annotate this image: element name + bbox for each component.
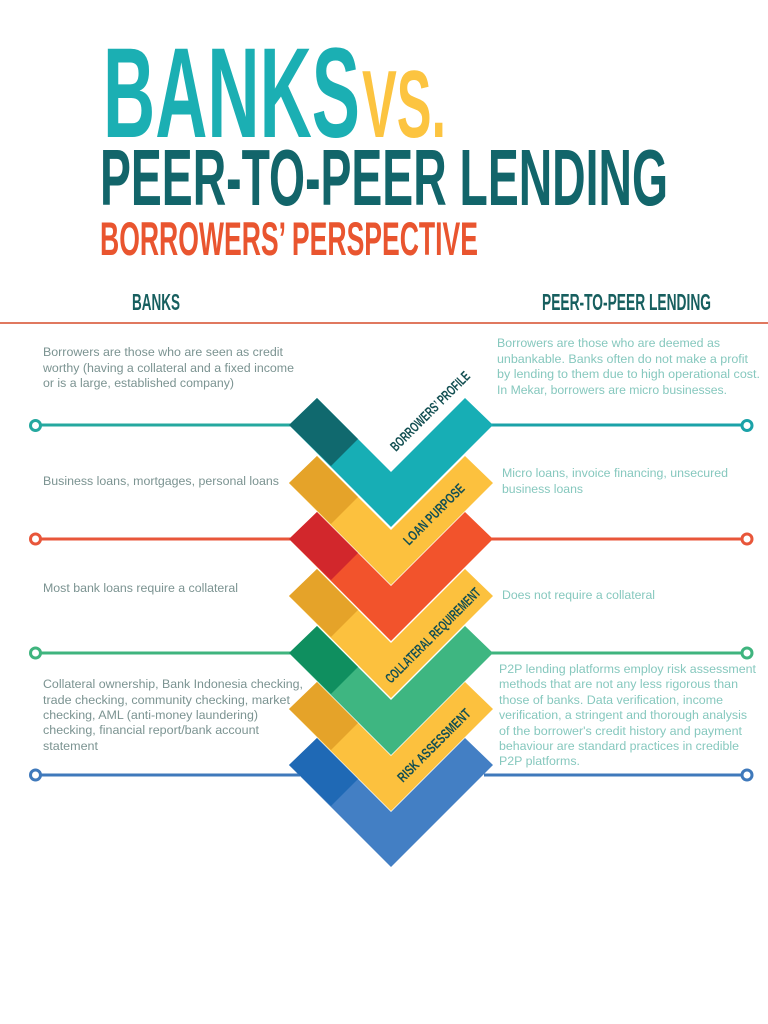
connector line: row 1	[30, 420, 752, 430]
text: banks loan purpose: Business loans, mortgages, personal loans	[43, 474, 279, 488]
text: P2P risk assessment: of the borrower's credit history and payment	[499, 724, 743, 738]
connector line: row 2	[30, 534, 752, 544]
text: banks collateral requirement: Most bank loans require a collateral	[43, 581, 238, 595]
text: P2P borrowers' profile: In Mekar, borrowers are micro businesses.	[497, 383, 727, 397]
column heading: Banks: BANKS	[132, 289, 180, 315]
chevron: yellow, risk assessment	[289, 682, 493, 811]
text: P2P loan purpose: Micro loans, invoice financing, unsecured	[502, 466, 728, 480]
connector line: row 4	[30, 770, 752, 780]
text: P2P loan purpose: business loans	[502, 482, 583, 496]
text: P2P borrowers' profile: Borrowers are those who are deemed as	[497, 336, 720, 350]
label: collateral requirement: COLLATERAL REQUIREMENT	[382, 584, 484, 686]
chevron: yellow, collateral requirement	[289, 569, 493, 698]
title: Banks vs.: BANKS	[103, 22, 360, 165]
chevron: red	[289, 512, 493, 641]
label: risk assessment: RISK ASSESSMENT	[394, 705, 474, 785]
text: P2P risk assessment: those of banks. Data verification, income	[499, 693, 723, 707]
text: banks risk assessment: checking, financial report/bank account	[43, 723, 260, 737]
text: banks borrowers' profile: worthy (having a collateral and a fixed income	[42, 361, 294, 375]
text: P2P borrowers' profile: unbankable. Banks often do not make a profit	[497, 352, 749, 366]
text: banks risk assessment	[43, 677, 303, 753]
chevron: green	[289, 626, 493, 755]
text: P2P risk assessment: P2P lending platforms employ risk assessment	[499, 662, 757, 676]
text: P2P borrowers' profile: by lending to them due to high operational cost.	[497, 367, 760, 381]
chevron: teal, borrowers' profile	[289, 398, 493, 527]
text: P2P collateral requirement: Does not require a collateral	[502, 588, 655, 602]
text: P2P risk assessment: behaviour are standard practices in credible	[499, 739, 739, 753]
text: banks borrowers' profile: Borrowers are those who are seen as credit	[43, 345, 284, 359]
chevron: yellow, loan purpose	[289, 456, 493, 585]
text: P2P risk assessment	[499, 662, 757, 768]
text: banks borrowers' profile: or is a large, established company)	[43, 376, 234, 390]
connector line: row 3	[30, 648, 752, 658]
text: banks borrowers' profile	[42, 345, 294, 390]
chevron: blue	[289, 738, 493, 867]
label: loan purpose: LOAN PURPOSE	[400, 480, 468, 548]
title: Banks vs.: VS.	[362, 51, 446, 158]
text: P2P loan purpose	[502, 466, 728, 496]
text: banks risk assessment: checking, AML (anti-money laundering)	[43, 708, 258, 722]
text: P2P risk assessment: methods that are not any less rigorous than	[499, 677, 738, 691]
subtitle: Borrowers' perspective: BORROWERS’ PERSPECTIVE	[100, 212, 478, 265]
text: P2P risk assessment: verification, a stringent and thorough analysis	[499, 708, 747, 722]
text: banks risk assessment: Collateral ownership, Bank Indonesia checking,	[43, 677, 303, 691]
text: banks risk assessment: statement	[43, 739, 99, 753]
text: P2P borrowers' profile	[497, 336, 760, 397]
text: banks risk assessment: trade checking, community checking, market	[43, 693, 291, 707]
text: P2P risk assessment: P2P platforms.	[499, 754, 580, 768]
chevron stack	[289, 398, 493, 867]
label: borrowers' profile: BORROWERS’ PROFILE	[387, 368, 473, 454]
